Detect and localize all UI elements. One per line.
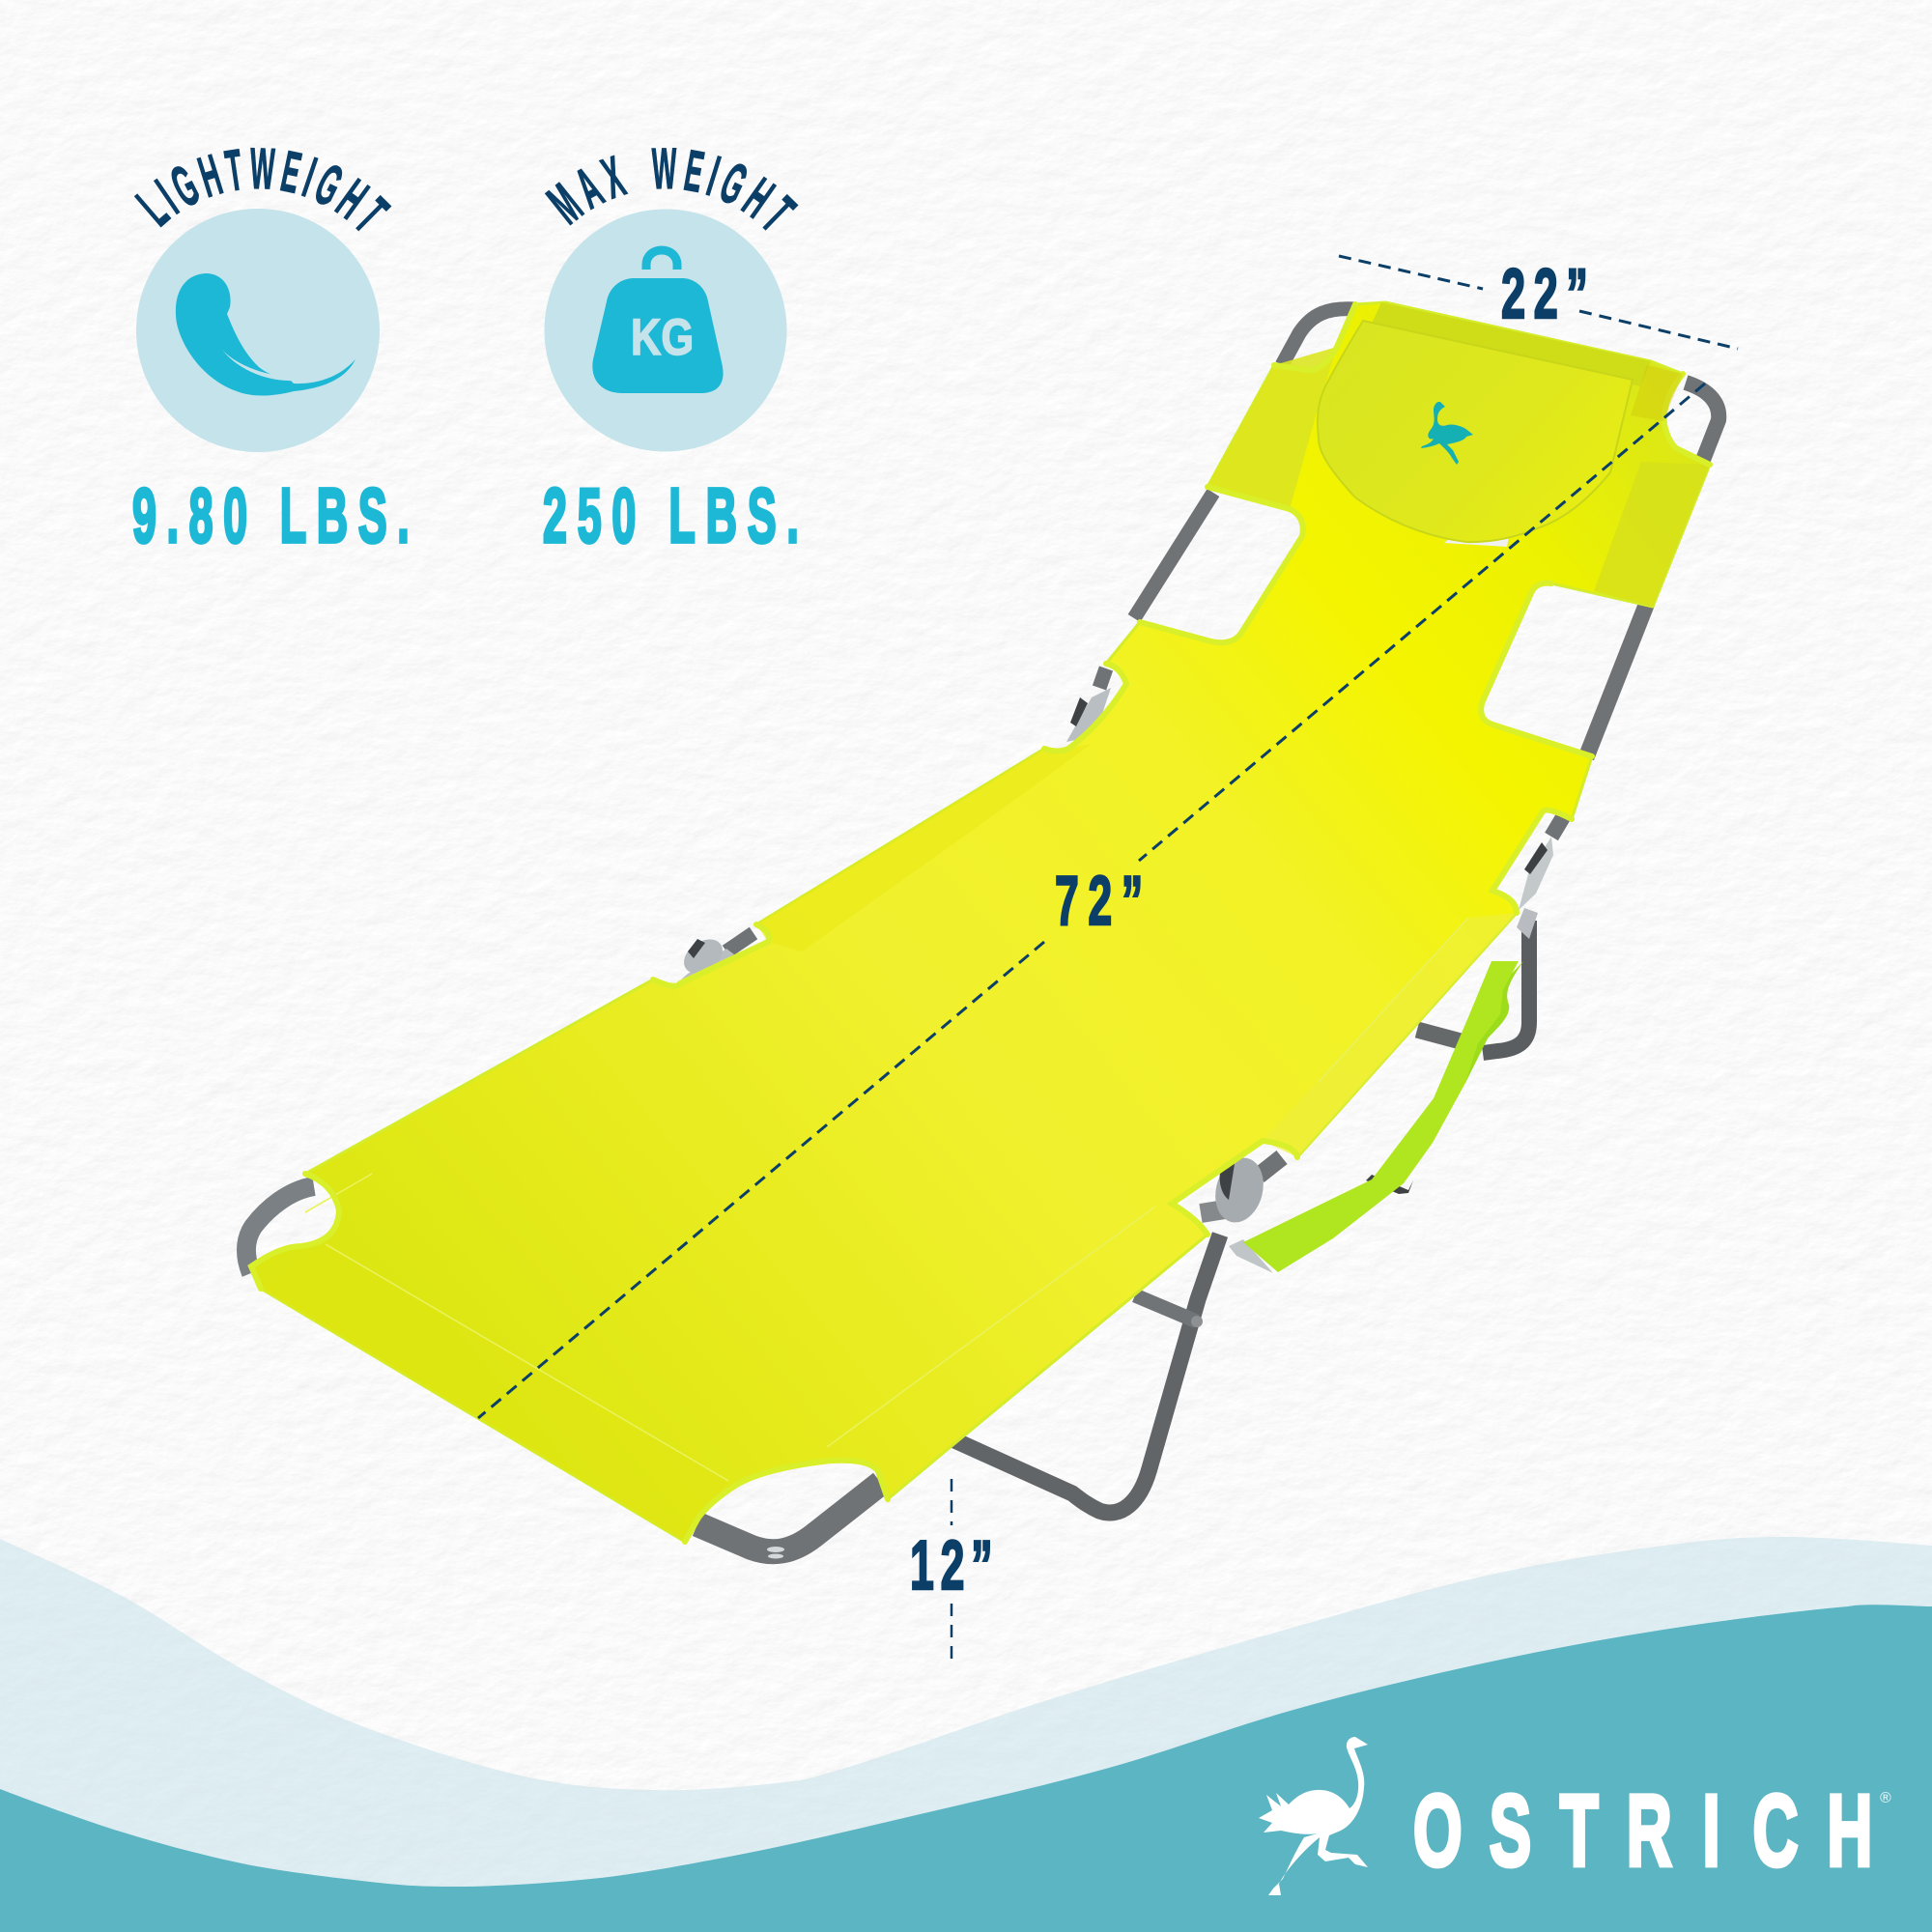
light blue wave: [0, 1537, 1932, 1932]
curved label: lightweight: H: [326, 168, 379, 231]
icon: feather: [176, 273, 355, 396]
curved label: max weight: T: [750, 186, 807, 243]
icon: kg weight: [592, 250, 724, 393]
logo wordmark: OSTRICH: [1413, 1774, 1872, 1888]
lower edge lighter band: [1263, 913, 1517, 1157]
curved label: max weight: A: [565, 156, 612, 221]
dimension: length dashed line: [478, 384, 1705, 1418]
value: 250 lbs: 250 LBS.: [543, 471, 799, 558]
label: 12 inch: 12”: [910, 1526, 993, 1605]
curved label: max weight: I: [700, 144, 726, 209]
hinge metal: [677, 688, 1553, 1327]
pillow: [1318, 302, 1683, 547]
curved label: lightweight: W: [249, 136, 275, 202]
label: 72 inch: 72”: [1055, 862, 1143, 940]
icon circle: max weight: [545, 209, 786, 452]
strap: [1243, 961, 1523, 1272]
curved label: lightweight: L: [126, 179, 180, 238]
tube highlights: [767, 1547, 784, 1559]
curved label: lightweight: I: [296, 146, 324, 210]
dimension: height dashed line: [951, 1479, 952, 1664]
icon: small ostrich logo: [1421, 402, 1473, 465]
chair frame: [246, 309, 1719, 1551]
teal wave: [0, 1605, 1932, 1932]
curved label: lightweight: I: [146, 168, 188, 226]
curved label: max weight: G: [711, 151, 756, 217]
curved label: max weight: W: [652, 136, 677, 202]
value: 9.80 lbs: 9.80 LBS.: [132, 471, 410, 558]
curved label: lightweight: E: [276, 139, 306, 206]
curved label: max weight: [536, 136, 807, 243]
foot panel shading: [261, 1244, 728, 1542]
curved label: max weight: M: [536, 172, 593, 237]
curved label: lightweight: G: [305, 152, 353, 219]
dimension: width dashed line: [1339, 256, 1738, 349]
upper edge fold shading: [756, 744, 1092, 952]
logo ostrich silhouette: [1259, 1737, 1368, 1895]
curved label: lightweight: T: [343, 187, 400, 244]
head panel darker strip: [1594, 462, 1710, 607]
curved label: lightweight: [126, 136, 400, 244]
icon: kg weight: KG: [631, 309, 694, 366]
icon circle: lightweight: [136, 209, 380, 452]
curved label: lightweight: H: [191, 142, 229, 210]
curved label: max weight: H: [732, 166, 784, 230]
logo registered mark: ®: [1880, 1790, 1891, 1806]
hole binding edges: [251, 304, 1710, 1542]
curved label: max weight: X: [595, 144, 632, 212]
curved label: lightweight: G: [161, 153, 209, 220]
label: 22 inch: 22”: [1501, 254, 1588, 333]
fabric lounger bed: [251, 302, 1710, 1542]
curved label: lightweight: T: [222, 137, 247, 204]
stitching lines: [305, 918, 1468, 1481]
left shoulder panel: [1208, 347, 1337, 509]
curved label: max weight: E: [680, 138, 708, 205]
brand logo: [1259, 1737, 1891, 1895]
